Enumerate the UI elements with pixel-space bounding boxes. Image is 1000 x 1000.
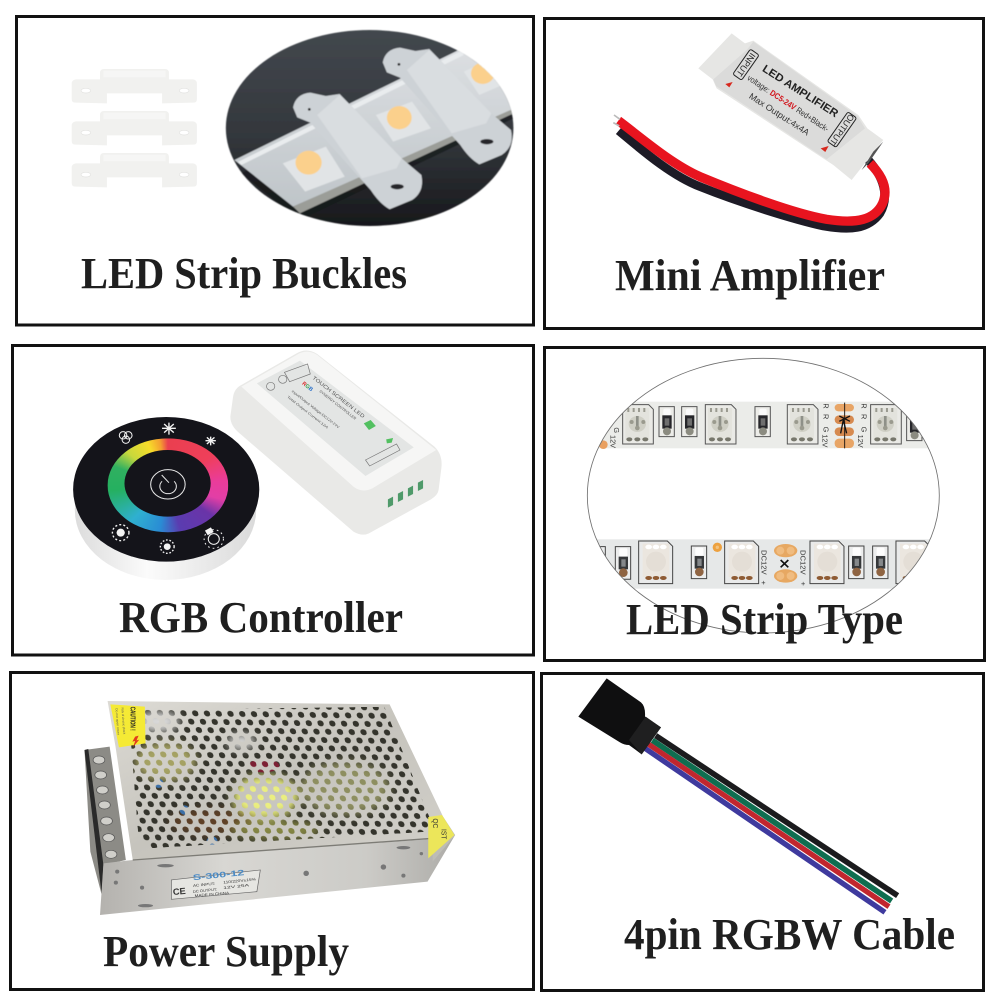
yellow caution label: Do not open cover — [114, 708, 120, 735]
upper strip — [583, 402, 943, 449]
yellow caution label: Risk of electric shock — [120, 707, 126, 735]
yellow corner label: IST — [439, 829, 446, 839]
product label: CE — [172, 886, 186, 897]
upper strip: R — [821, 403, 830, 409]
interior seen through mesh — [131, 706, 430, 848]
product label: DC OUTPUT: — [193, 888, 217, 894]
panel: LED Strip Type — [544, 348, 984, 660]
photo: LED strips in oval — [583, 358, 943, 633]
upper strip: G — [821, 427, 830, 433]
heading: Power Supply: Power Supply — [103, 927, 349, 976]
red wire — [618, 121, 885, 221]
upper strip: 12V — [821, 434, 830, 447]
panel: LED Strip Buckles — [16, 16, 534, 325]
icon: power supply unit — [84, 698, 455, 915]
connector — [578, 678, 661, 754]
upper strip: R — [859, 403, 868, 409]
icon: controller box: Input/Output Voltage:DC12V-24V — [291, 389, 341, 430]
product label: S-300-12 — [192, 868, 245, 882]
lower strip: + — [761, 578, 766, 587]
INPUT tag: INPUT — [734, 51, 758, 79]
lower strip — [583, 539, 943, 589]
OUTPUT tag: OUTPUT — [827, 112, 856, 148]
label text: Max Output:4x4A — [747, 91, 812, 138]
terminal block — [84, 747, 126, 895]
black wire — [656, 736, 898, 896]
upper strip: G — [859, 427, 868, 433]
power button — [151, 470, 185, 499]
upper strip: 12V — [856, 435, 865, 448]
yellow caution label — [110, 704, 146, 747]
label text: LED AMPLIFIER — [760, 63, 840, 120]
label text: voltage: DC5-24V Red+Black- — [746, 73, 831, 134]
black wire — [619, 131, 885, 228]
upper strip: R — [821, 414, 830, 419]
icon: controller box: TOUCH SCREEN LED — [311, 375, 366, 420]
wire tips — [613, 115, 620, 126]
heading: LED Strip Buckles: LED Strip Buckles — [81, 249, 407, 298]
panel: Mini Amplifier — [544, 18, 984, 328]
icon: 4-pin connector cable — [578, 678, 898, 912]
icon: mini amplifier with wires — [613, 33, 885, 228]
product label: 110/220V±15% — [223, 877, 257, 885]
heading: LED Strip Type: LED Strip Type — [626, 595, 903, 644]
yellow caution label: CAUTION ! — [128, 707, 135, 731]
touch icons — [112, 423, 223, 553]
product label — [171, 868, 260, 899]
yellow corner label: QC — [431, 818, 438, 828]
icon: controller box: Total Output Current:12A — [286, 395, 330, 430]
amplifier body — [698, 33, 883, 180]
heading: Mini Amplifier: Mini Amplifier — [615, 251, 885, 300]
upper strip: 12V — [609, 435, 618, 448]
icon: three white buckles — [72, 69, 197, 187]
product label: 12V 25A — [223, 883, 250, 890]
upper strip: G — [612, 427, 621, 433]
panel: RGB Controller — [12, 346, 534, 655]
red wire — [649, 744, 889, 907]
yellow corner label — [428, 815, 454, 858]
heading: RGB Controller: RGB Controller — [119, 593, 403, 642]
panel: Power Supply — [10, 672, 534, 990]
icon: controller box — [230, 350, 442, 535]
lower strip: + — [801, 579, 805, 588]
icon: controller box: SYNERGY CONTROLLER — [318, 389, 357, 421]
upper strip: R — [859, 414, 868, 419]
photo: buckles on LED strip in oval — [226, 30, 524, 226]
heading: 4pin RGBW Cable: 4pin RGBW Cable — [624, 910, 955, 959]
top cover — [108, 701, 443, 860]
panel: 4pin RGBW Cable — [542, 674, 984, 990]
blue wire — [645, 748, 885, 912]
product label: AC INPUT: — [193, 882, 216, 888]
front face — [100, 835, 455, 915]
lower strip: DC12V — [799, 550, 808, 576]
green wire — [652, 740, 892, 901]
screws — [114, 846, 423, 907]
icon: round touch remote — [73, 417, 259, 580]
lower strip: DC12V — [759, 550, 768, 576]
icon: controller box: RGB — [300, 381, 314, 393]
product label: MADE IN CHINA — [195, 891, 230, 898]
